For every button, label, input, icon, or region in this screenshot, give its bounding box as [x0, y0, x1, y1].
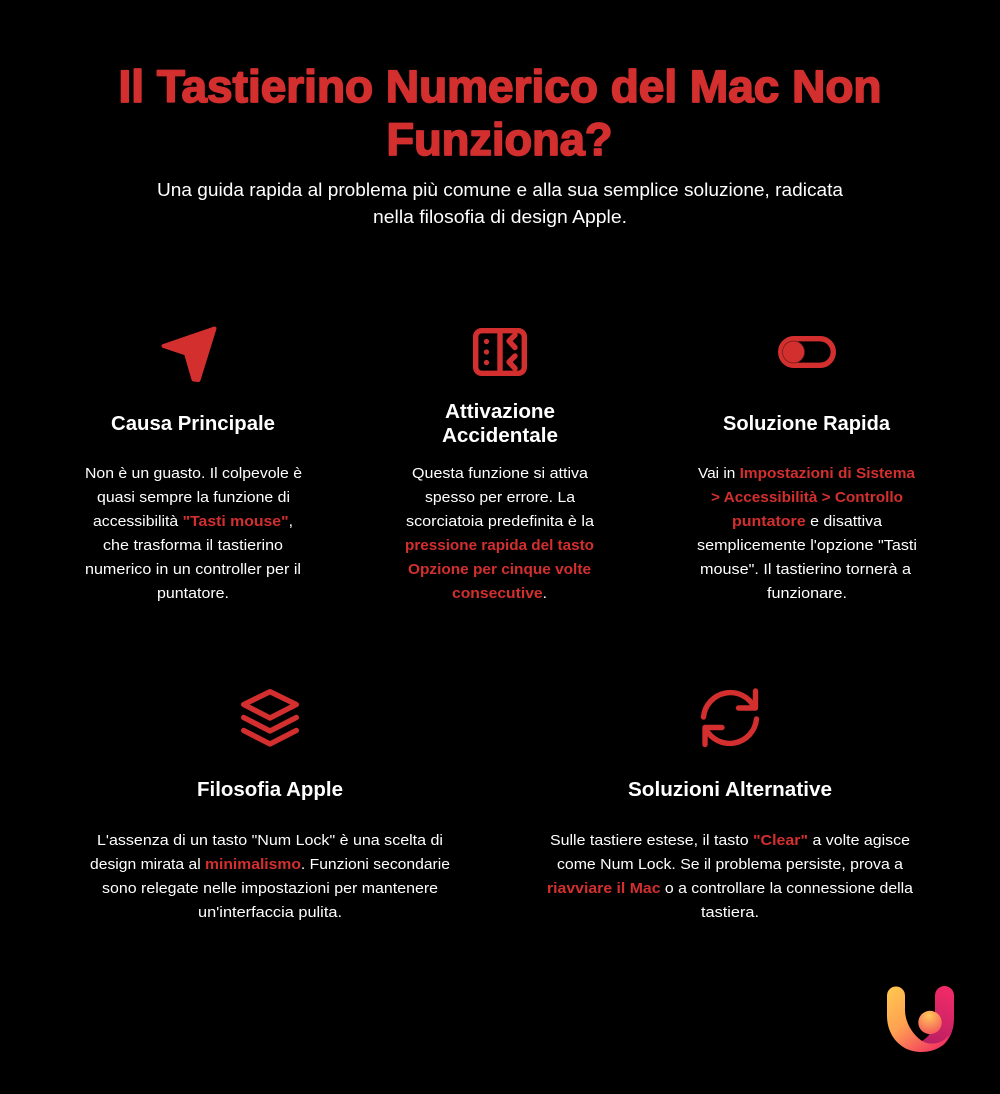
text: soluzione rapida: mouse". Il tastierino tornerà a	[700, 562, 912, 578]
text: soluzioni alternative: tastiera.	[701, 905, 759, 921]
icon: keyboard shortcut	[476, 331, 524, 373]
text: attivazione accidentale: scorciatoia predefinita è la	[406, 514, 595, 530]
title: Funziona?	[386, 114, 612, 165]
title: Il Tastierino Numerico del Mac Non	[118, 61, 882, 112]
text: attivazione accidentale	[405, 466, 595, 602]
text: filosofia apple: design mirata al minimalismo . Funzioni secondarie	[90, 857, 450, 873]
subtitle: Una guida rapida al problema più comune e alla sua semplice soluzione, radicata	[157, 180, 844, 200]
heading: causa principale: Causa Principale	[111, 413, 275, 435]
text: causa principale: che trasforma il tastierino	[103, 538, 283, 554]
text: filosofia apple	[90, 833, 450, 921]
text: filosofia apple: un'interfaccia pulita.	[198, 905, 342, 921]
text: attivazione accidentale: Questa funzione si attiva	[412, 466, 589, 482]
logo	[887, 986, 954, 1052]
text: causa principale: Non è un guasto. Il colpevole è	[85, 466, 302, 482]
text: soluzioni alternative: Sulle tastiere estese, il tasto "Clear" a volte agisce	[550, 833, 910, 849]
text: attivazione accidentale: consecutive .	[452, 586, 547, 602]
title	[118, 61, 882, 165]
heading: filosofia apple: Filosofia Apple	[197, 779, 343, 801]
panel: filosofia apple	[90, 692, 450, 921]
text: soluzione rapida: puntatore e disattiva	[732, 514, 883, 530]
text: filosofia apple: L'assenza di un tasto "Num Lock" è una scelta di	[97, 833, 443, 849]
text: soluzione rapida: semplicemente l'opzione "Tasti	[697, 538, 917, 554]
text: soluzioni alternative	[547, 833, 914, 921]
subtitle: nella filosofia di design Apple.	[373, 207, 627, 227]
text: attivazione accidentale: pressione rapida del tasto	[405, 538, 594, 554]
text: attivazione accidentale: Opzione per cinque volte	[408, 562, 591, 578]
heading: attivazione accidentale: Attivazione	[445, 401, 555, 423]
text: soluzioni alternative: riavviare il Mac o a controllare la connessione della	[547, 881, 914, 897]
panel: causa principale	[85, 328, 302, 602]
text: causa principale: quasi sempre la funzione di	[97, 490, 290, 506]
panel: soluzioni alternative	[547, 691, 914, 921]
icon: navigation arrow	[164, 328, 214, 380]
icon: refresh arrows	[704, 691, 756, 744]
heading: soluzioni alternative: Soluzioni Alternative	[628, 779, 832, 801]
icon: layers	[244, 692, 296, 744]
text: attivazione accidentale: spesso per errore. La	[425, 490, 576, 506]
text: causa principale	[85, 466, 302, 602]
text: soluzione rapida: Vai in Impostazioni di Sistema	[698, 466, 916, 482]
text: soluzione rapida: funzionare.	[767, 586, 847, 602]
icon: toggle switch	[781, 339, 833, 365]
text: soluzioni alternative: come Num Lock. Se il problema persiste, prova a	[557, 857, 904, 873]
text: causa principale: accessibilità "Tasti mouse" ,	[93, 514, 293, 530]
text: soluzione rapida: > Accessibilità > Controllo	[711, 490, 903, 506]
heading: attivazione accidentale: Accidentale	[442, 425, 558, 447]
heading: soluzione rapida: Soluzione Rapida	[723, 413, 891, 435]
text: causa principale: puntatore.	[157, 586, 229, 602]
subtitle	[157, 180, 844, 227]
text: causa principale: numerico in un controller per il	[85, 562, 301, 578]
text: filosofia apple: sono relegate nelle impostazioni per mantenere	[102, 881, 438, 897]
text: soluzione rapida	[697, 466, 917, 602]
panel: soluzione rapida	[697, 339, 917, 602]
heading: attivazione accidentale	[442, 401, 558, 447]
panel: attivazione accidentale	[405, 331, 595, 602]
